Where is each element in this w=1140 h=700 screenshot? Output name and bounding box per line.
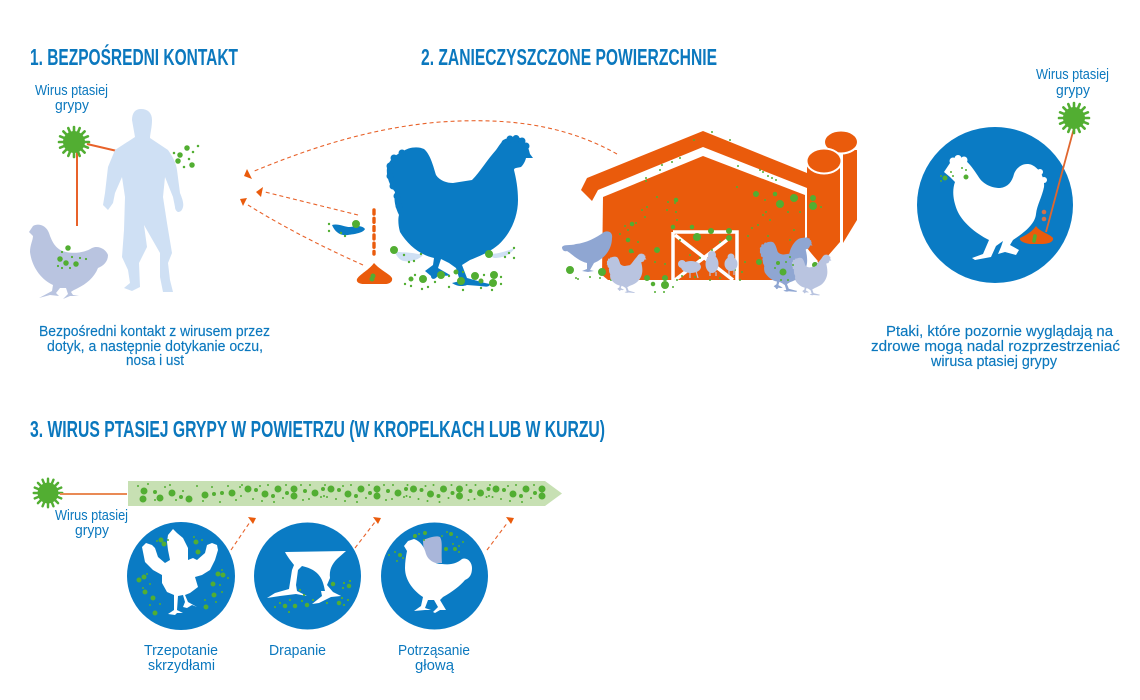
label: virus: Wirus ptasiej [1036,66,1109,83]
green droplets on barn [570,132,821,292]
droppings pile [1020,226,1053,244]
text: direct contact description [39,323,270,369]
pale feathers [395,248,515,261]
droppings pile [357,263,392,284]
label: head shaking [398,642,470,674]
feather [332,224,365,235]
pale hen [607,253,646,293]
virus droplets on chicken [58,248,86,268]
white scratching hen [267,551,346,604]
connector line [60,493,127,495]
icon: virus [34,479,62,507]
human silhouette [103,109,183,292]
label: virus: Wirus ptasiej [35,82,108,99]
text: direct contact description: dotyk, a następnie dotykanie oczu, [47,338,263,355]
label: virus: grypy [55,97,89,114]
white hen [944,155,1047,260]
label: flapping wings [144,642,218,674]
panel: healthy-looking birds [871,66,1121,370]
virus line [1046,128,1074,232]
ghost head [423,536,442,563]
falling droppings [1042,210,1046,221]
text: healthy-looking birds description [871,323,1121,370]
droplets [389,532,463,561]
periwinkle hens right [760,237,813,292]
large blue hen [386,135,533,287]
label: head shaking: Potrząsanie [398,642,470,659]
text: direct contact description: Bezpośredni kontakt z wirusem przez [39,323,270,340]
icon: barn with silos [581,130,858,280]
connector lines [77,144,117,226]
label: virus: Wirus ptasiej [55,507,128,524]
droplets on hens [775,257,815,280]
hens beside barn [562,231,831,295]
heading: 1. Bezpośredni kontakt: 1. BEZPOŚREDNI KONTAKT [30,43,238,70]
label: flapping wings: Trzepotanie [144,642,218,659]
icon: virus [59,127,89,157]
label: flapping wings: skrzydłami [148,657,215,674]
dashed arrows to surfaces [240,121,617,265]
pale hen right [792,254,831,295]
panel: contaminated surfaces [240,121,858,295]
heading: 2. Zanieczyszczone powierzchnie: 2. ZANIECZYSZCZONE POWIERZCHNIE [421,44,717,70]
circle: flapping wings [127,522,235,630]
label: virus: grypy [1056,82,1090,99]
airborne droplets arrow [128,481,575,506]
dashed arrows up to airborne band [231,517,514,550]
droplets [275,581,350,612]
label: virus [55,507,128,539]
droplets [139,537,228,613]
green droplets around hen [329,224,514,290]
icon: virus [1059,103,1089,133]
panel: airborne virus [34,479,575,674]
periwinkle hen left [562,231,612,272]
label: virus [1036,66,1109,99]
virus droplets near human [174,146,198,167]
pale chicken [29,225,108,299]
droplets on beak [941,168,966,181]
barn door [673,232,737,280]
orange falling dashes [372,210,376,254]
white flapping hen [142,529,218,615]
chicks in door [678,251,738,278]
label: head shaking: głową [415,657,455,674]
blue circle [917,127,1073,283]
circle: head shaking [381,522,488,630]
white hen [404,539,472,613]
label: virus [35,82,108,114]
heading: 3. Wirus ptasiej grypy w powietrzu: 3. WIRUS PTASIEJ GRYPY W POWIETRZU (W KROPELKACH LUB W KURZU) [30,416,605,442]
text: direct contact description: nosa i ust [126,352,185,369]
pile droplets [1034,236,1035,241]
circle: scratching [254,522,361,630]
label: virus: grypy [75,522,109,539]
panel: direct contact [29,82,270,369]
text: healthy-looking birds description: Ptaki, które pozornie wyglądają na [886,323,1114,340]
text: healthy-looking birds description: zdrowe mogą nadal rozprzestrzeniać [871,338,1121,355]
label: scratching: Drapanie [269,642,326,659]
text: healthy-looking birds description: wirusa ptasiej grypy [930,353,1057,370]
